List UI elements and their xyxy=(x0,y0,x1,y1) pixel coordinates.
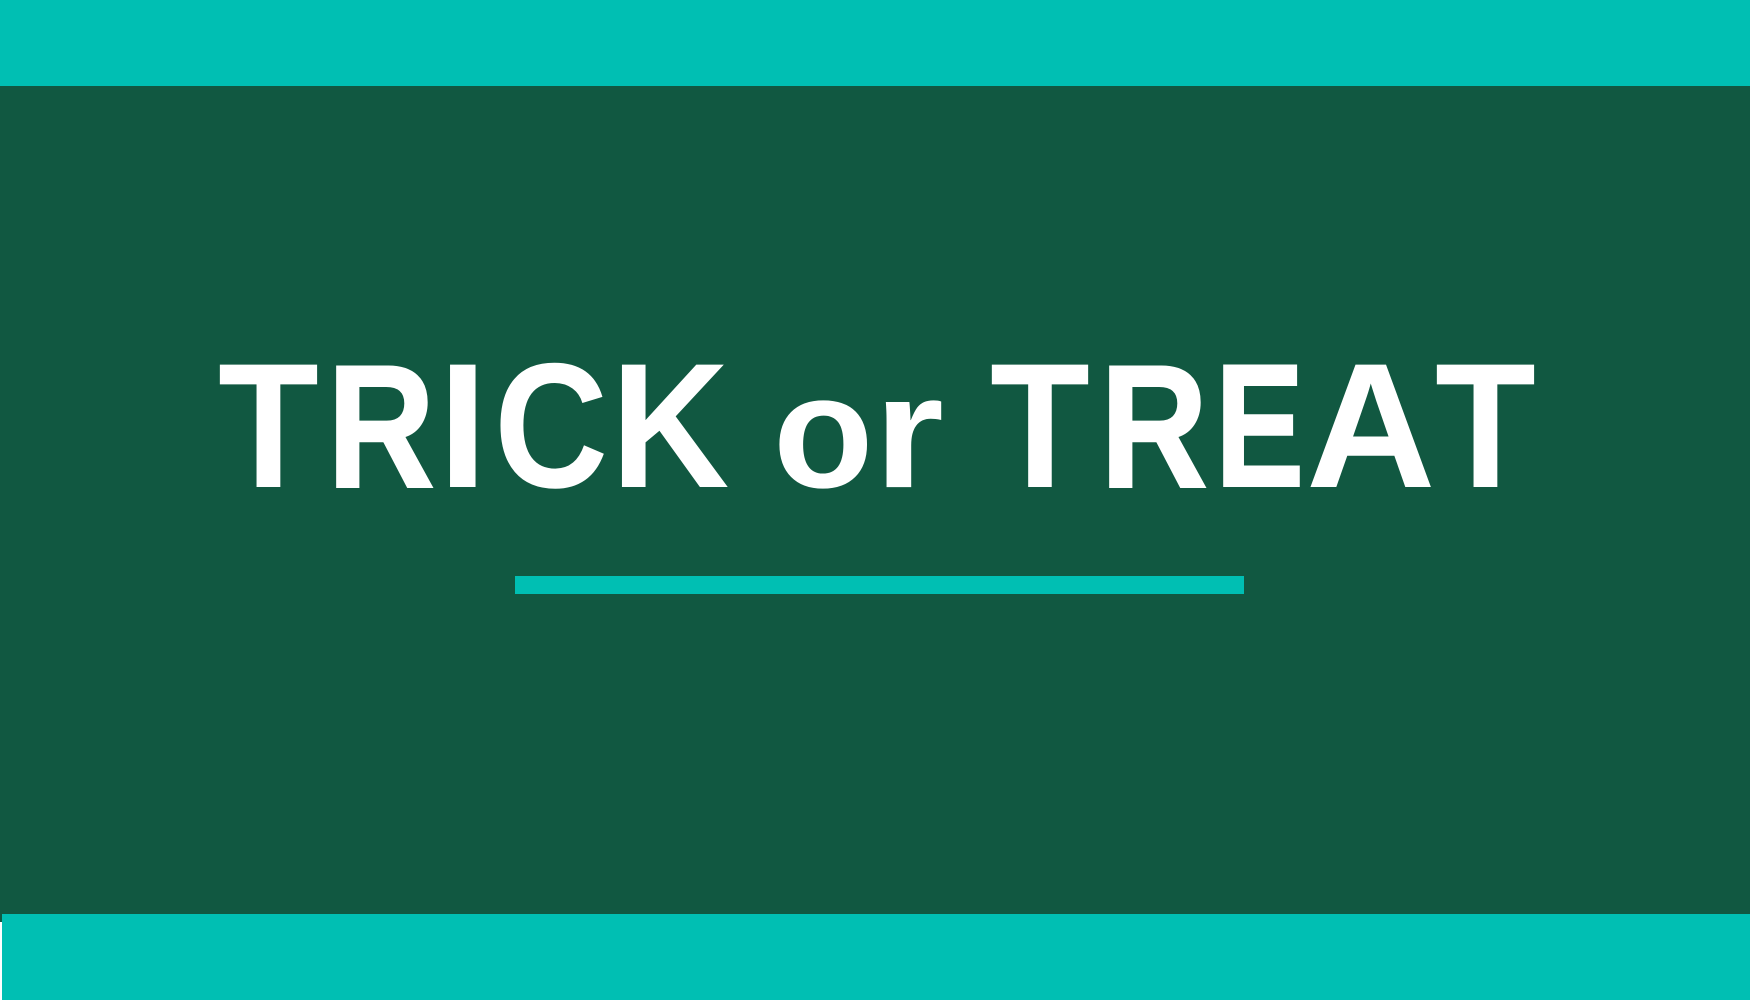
title: TRICK or TREAT: R xyxy=(327,328,435,524)
title: TRICK or TREAT: A xyxy=(1306,326,1436,525)
bottom teal band xyxy=(2,914,1750,1000)
title: TRICK or TREAT: T xyxy=(990,326,1090,525)
teal underline bar xyxy=(514,576,1244,594)
title: TRICK or TREAT: I xyxy=(438,326,487,525)
title: TRICK or TREAT xyxy=(218,326,1535,525)
title: TRICK or TREAT: K xyxy=(611,326,729,525)
title: TRICK or TREAT: T xyxy=(1435,326,1535,525)
title: TRICK or TREAT: o xyxy=(773,341,874,521)
title: TRICK or TREAT: T xyxy=(218,326,318,525)
top teal band xyxy=(0,0,1750,86)
title: TRICK or TREAT: E xyxy=(1215,327,1304,523)
title: TRICK or TREAT: R xyxy=(1100,328,1208,524)
title: TRICK or TREAT: C xyxy=(494,326,608,525)
title: TRICK or TREAT: r xyxy=(874,341,944,521)
